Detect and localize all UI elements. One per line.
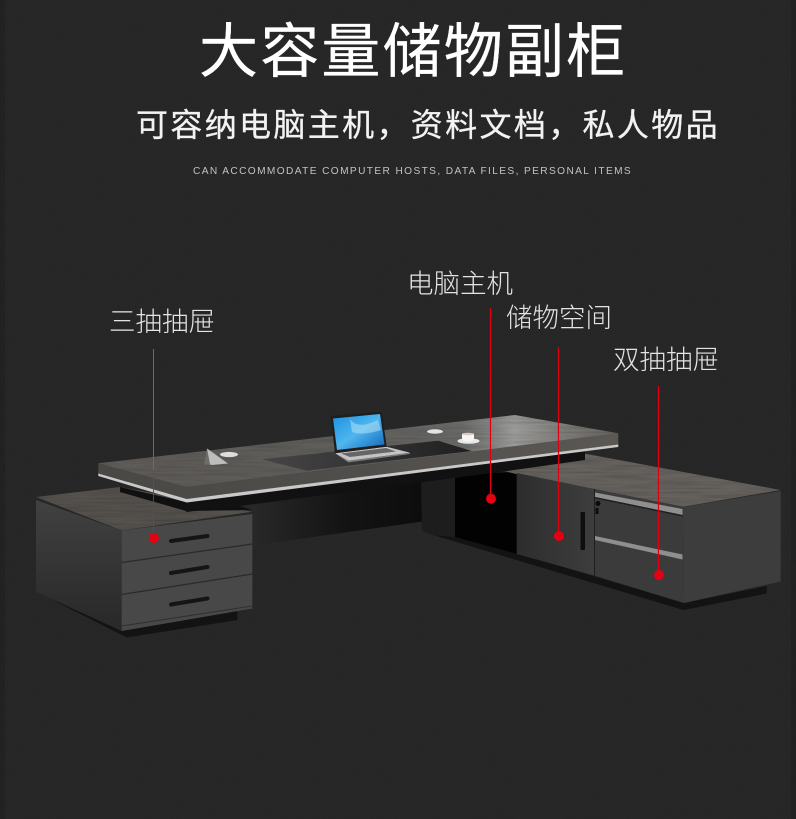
pedestal top bbox=[36, 487, 252, 530]
pen holder bbox=[207, 448, 228, 465]
open computer bay bbox=[455, 472, 517, 554]
under-desk shadow block bbox=[120, 487, 252, 511]
callout: double drawers pointer bbox=[654, 386, 664, 580]
label: storage space: 储物空间 bbox=[506, 303, 612, 333]
desktop edge bbox=[98, 433, 618, 499]
subtitle: 可容纳电脑主机，资料文档，私人物品 bbox=[136, 107, 720, 143]
callout: storage space pointer bbox=[554, 347, 564, 541]
desk mat bbox=[262, 441, 472, 471]
pedestal drawers bbox=[122, 514, 252, 631]
light strip bbox=[98, 444, 618, 502]
desk illustration bbox=[36, 412, 781, 638]
cabinet drawers bbox=[594, 489, 684, 603]
label: double drawers: 双抽抽屉 bbox=[613, 345, 719, 375]
coffee cup bbox=[458, 433, 480, 444]
drawer handles bbox=[171, 536, 208, 604]
label: three drawers: 三抽抽屉 bbox=[109, 307, 215, 337]
door handle bbox=[580, 512, 585, 550]
right cabinet bbox=[421, 453, 781, 610]
callout: three drawers pointer bbox=[149, 349, 159, 543]
callout: computer host pointer bbox=[486, 308, 496, 504]
main desktop bbox=[98, 412, 618, 502]
cabinet side panel bbox=[684, 491, 781, 603]
pedestal side bbox=[36, 500, 122, 631]
cabinet top surface bbox=[500, 453, 781, 507]
cabinet left support bbox=[421, 474, 456, 537]
cabinet plinth bbox=[433, 535, 767, 610]
pedestal plinth bbox=[49, 598, 237, 638]
grommets bbox=[220, 452, 238, 457]
cabinet door bbox=[517, 473, 594, 576]
desktop surface bbox=[98, 415, 618, 487]
english subtitle: CAN ACCOMMODATE COMPUTER HOSTS, DATA FILES, PERSONAL ITEMS bbox=[193, 165, 632, 177]
label: computer host: 电脑主机 bbox=[407, 269, 513, 299]
modesty panel bbox=[240, 470, 440, 546]
left pedestal bbox=[36, 487, 252, 638]
laptop bbox=[331, 412, 410, 462]
title: 大容量储物副柜 bbox=[199, 19, 627, 85]
